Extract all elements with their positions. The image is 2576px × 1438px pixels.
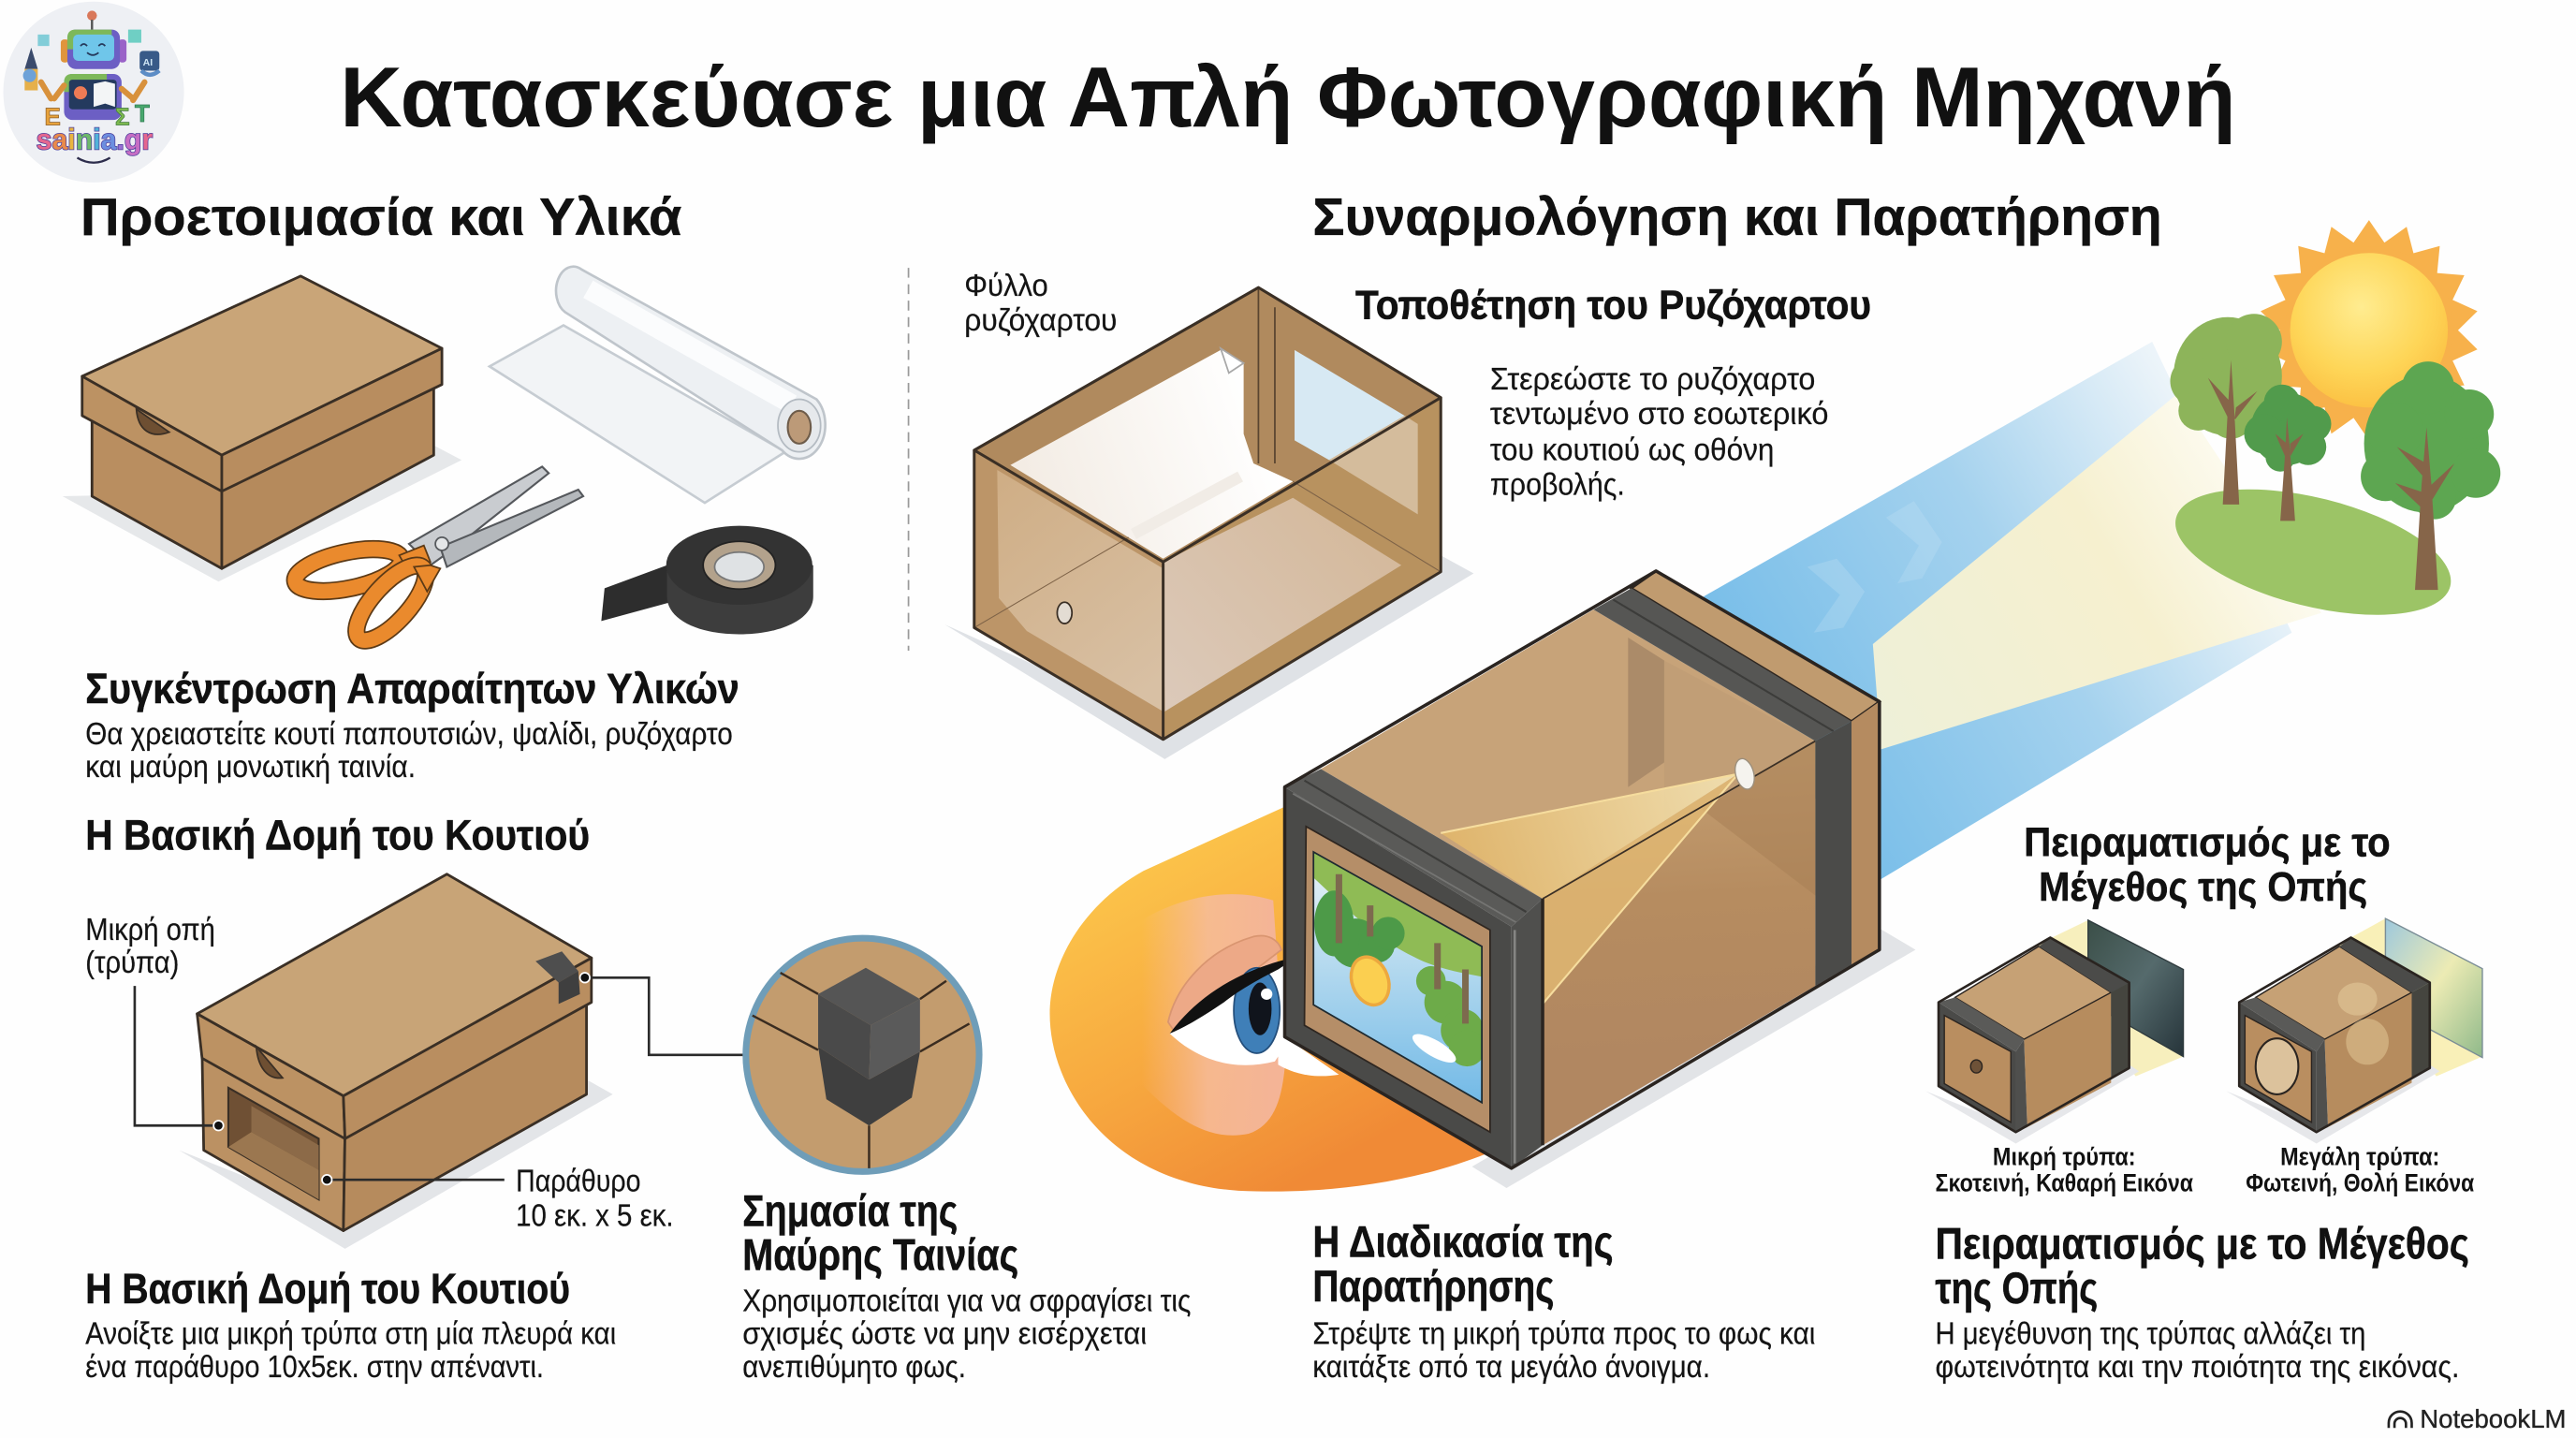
label: window size: 10 εκ. x 5 εκ. <box>516 1198 674 1233</box>
logo: sainia.gr robot badge <box>4 2 184 183</box>
label: small hole: (τρύπα) <box>85 946 179 980</box>
heading: preparation and materials: Προετοιμασία και Υλικά <box>80 187 681 246</box>
label: window size <box>516 1164 674 1233</box>
text block: importance of black tape: Χρησιμοποιείται για να σφραγίσει τις <box>742 1284 1191 1319</box>
text block: rice paper instructions: Στερεώστε το ρυζόχαρτο <box>1490 362 1815 397</box>
heading: experiment with hole size: Πειραματισμός με το <box>2024 819 2391 865</box>
heading: experiment with hole size: Μέγεθος της Οπής <box>2039 864 2367 910</box>
logo: sainia.gr robot badge: sainia.gr <box>37 123 153 156</box>
illustration: ground and trees <box>2163 314 2500 638</box>
caption: large hole: Μεγάλη τρύπα: <box>2280 1141 2439 1170</box>
caption: small hole: Σκοτεινή, Καθαρή Εικόνα <box>1936 1167 2193 1196</box>
heading: placing the rice paper: Τοποθέτηση του Ρυζόχαρτου <box>1355 282 1871 328</box>
text block: experiment with hole size: Η μεγέθυνση της τρύπας αλλάζει τη <box>1936 1317 2365 1352</box>
text block: observation process: Η Διαδικασία της <box>1312 1218 1614 1268</box>
illustration: box with window and hole <box>135 874 744 1249</box>
title: Κατασκεύασε μια Απλή Φωτογραφική Μηχανή <box>340 50 2236 145</box>
leader line: small hole <box>135 986 217 1125</box>
text block: rice paper instructions <box>1490 362 1828 502</box>
text block: rice paper instructions: προβολής. <box>1490 467 1625 502</box>
label: small hole: Μικρή οπή <box>85 913 215 947</box>
logo: sainia.gr robot badge: Ε <box>44 102 61 130</box>
projected inverted image <box>1314 854 1481 1101</box>
text block: observation process: Στρέψτε τη μικρή τρύπα προς το φως και <box>1312 1317 1815 1352</box>
heading: assembly and observation: Συναρμολόγηση και Παρατήρηση <box>1312 187 2162 246</box>
text block: observation process: Παρατήρησης <box>1312 1262 1554 1312</box>
watermark: NotebookLM: NotebookLM <box>2420 1404 2566 1433</box>
text block: basic box structure <box>85 1265 616 1385</box>
logo: sainia.gr robot badge: Σ <box>115 102 130 130</box>
light beam from scene to camera <box>1704 342 2321 879</box>
caption: large hole <box>2246 1141 2474 1196</box>
caption: small hole <box>1936 1141 2193 1196</box>
text block: basic box structure: Η Βασική Δομή του Κουτιού <box>85 1265 570 1313</box>
text block: rice paper instructions: τεντωμένο στο εοωτερικό <box>1490 397 1828 432</box>
caption: small hole: Μικρή τρύπα: <box>1993 1141 2136 1170</box>
text block: importance of black tape: Μαύρης Ταινίας <box>742 1231 1018 1281</box>
text block: importance of black tape: ανεπιθύμητο φως. <box>742 1350 966 1385</box>
illustration: sun <box>2258 220 2481 440</box>
leader line: window <box>327 1179 505 1181</box>
heading: experiment with hole size <box>2024 819 2391 910</box>
logo: sainia.gr robot badge: AI <box>143 57 153 68</box>
caption: large hole: Φωτεινή, Θολή Εικόνα <box>2246 1167 2474 1196</box>
text block: experiment with hole size: Πειραματισμός με το Μέγεθος <box>1936 1219 2469 1269</box>
label: window size: Παράθυρο <box>516 1164 640 1198</box>
text block: basic box structure: Ανοίξτε μια μικρή τρύπα στη μία πλευρά και <box>85 1317 616 1352</box>
illustration: small hole camera <box>1925 920 2184 1144</box>
text block: observation process <box>1312 1218 1815 1385</box>
label: rice paper sheet: Φύλλο <box>964 269 1048 303</box>
eye-side orange light cone <box>1050 807 1486 1192</box>
illustration: eye looking into camera <box>1142 894 1339 1136</box>
illustration: assembled pinhole camera <box>1284 571 1915 1188</box>
text block: importance of black tape <box>742 1186 1191 1385</box>
label: rice paper sheet: ρυζόχαρτου <box>964 303 1117 338</box>
illustration: scissors <box>291 466 583 651</box>
illustration: roll of rice paper <box>490 267 826 503</box>
label: rice paper sheet <box>964 269 1117 338</box>
logo: sainia.gr robot badge: Τ <box>135 99 150 127</box>
detail circle: tape sealing corner <box>746 938 979 1171</box>
text block: gather materials: και μαύρη μονωτική ταινία. <box>85 750 416 785</box>
text block: importance of black tape: Σημασία της <box>742 1186 958 1236</box>
text block: experiment with hole size: της Οπής <box>1936 1264 2098 1313</box>
text block: gather materials: Θα χρειαστείτε κουτί παπουτσιών, ψαλίδι, ρυζόχαρτο <box>85 717 733 752</box>
text block: importance of black tape: σχισμές ώστε να μην εισέρχεται <box>742 1317 1147 1352</box>
illustration: black insulating tape <box>601 526 813 634</box>
heading: basic box structure: Η Βασική Δομή του Κουτιού <box>85 811 590 858</box>
text block: gather materials <box>85 665 739 785</box>
text block: rice paper instructions: του κουτιού ως οθόνη <box>1490 433 1775 467</box>
label: small hole <box>85 913 215 980</box>
illustration: closed shoe box <box>63 276 461 581</box>
illustration: open translucent box with rice paper <box>944 287 1473 759</box>
leader line: tape to detail circle <box>587 977 744 1055</box>
text block: gather materials: Συγκέντρωση Απαραίτητων Υλικών <box>85 665 739 712</box>
text block: experiment with hole size: φωτεινότητα και την ποιότητα της εικόνας. <box>1936 1350 2459 1385</box>
text block: observation process: καιτάξτε οπό τα μεγάλο άνοιγμα. <box>1312 1350 1710 1385</box>
text block: basic box structure: ένα παράθυρο 10x5εκ. στην απέναντι. <box>85 1350 544 1385</box>
illustration: large hole camera <box>2226 918 2482 1144</box>
text block: experiment with hole size <box>1936 1219 2469 1385</box>
